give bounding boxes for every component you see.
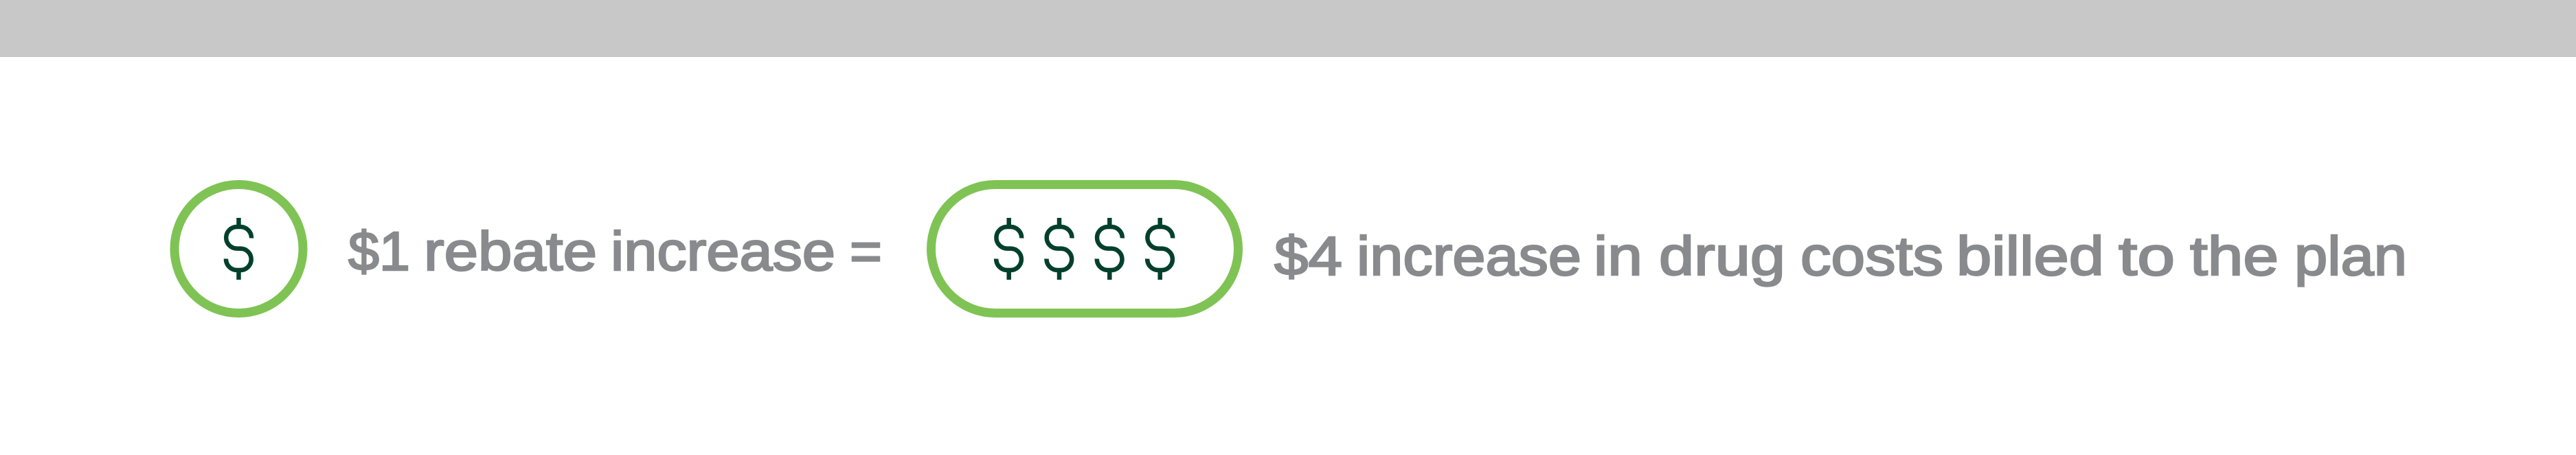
text: $4 increase in drug costs billed to the plan: drug [1659, 225, 1785, 287]
text: $1 rebate increase: $1 [348, 221, 410, 282]
icon: single dollar in circle [174, 184, 303, 313]
text: $4 increase in drug costs billed to the plan: the [2190, 225, 2279, 287]
text: $4 increase in drug costs billed to the plan [1274, 225, 2407, 287]
text: $1 rebate increase: increase [611, 221, 835, 282]
text: $1 rebate increase: = [850, 221, 882, 282]
text: $4 increase in drug costs billed to the plan: in [1594, 225, 1642, 287]
top grey band [0, 0, 2576, 57]
text: $4 increase in drug costs billed to the plan: $4 [1274, 225, 1342, 287]
text: $1 rebate increase [348, 221, 882, 282]
icon: four dollars in pill [931, 184, 1238, 313]
text: $4 increase in drug costs billed to the plan: plan [2294, 225, 2407, 287]
text: $4 increase in drug costs billed to the plan: to [2119, 225, 2175, 287]
text: $1 rebate increase: rebate [424, 221, 597, 282]
text: $4 increase in drug costs billed to the plan: billed [1956, 225, 2104, 287]
text: $4 increase in drug costs billed to the plan: costs [1800, 225, 1943, 287]
text: $4 increase in drug costs billed to the plan: increase [1357, 225, 1581, 287]
